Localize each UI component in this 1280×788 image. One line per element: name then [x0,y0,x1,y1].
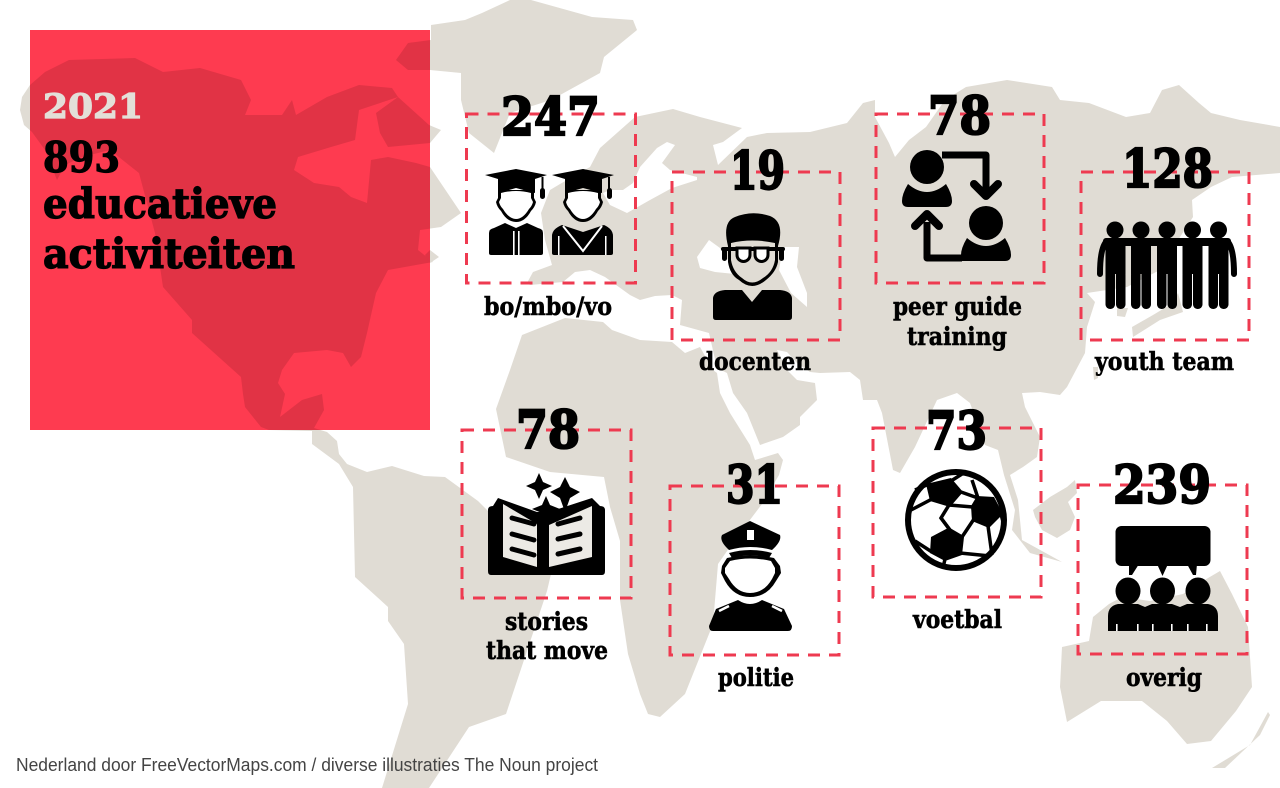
count 128: 128 [1122,139,1213,200]
item: overig [1078,455,1247,692]
count 19: 19 [730,141,785,202]
label stories that move: that move [486,636,608,665]
label peer guide training: peer guide [893,292,1022,321]
count 73: 73 [926,401,987,462]
title text: 893 [43,133,120,182]
label politie: politie [718,663,794,692]
count 247: 247 [501,87,600,148]
label bo/mbo/vo: bo/mbo/vo [484,292,612,321]
label overig: overig [1126,663,1202,692]
label peer guide training: training [907,322,1007,351]
item: voetbal [873,401,1041,634]
count 78: 78 [516,400,580,461]
label youth team: youth team [1094,347,1234,376]
label voetbal: voetbal [912,605,1002,634]
item: docenten [672,141,840,376]
item: youth team [1081,139,1249,376]
icon: two graduates [485,169,614,255]
label peer guide training [893,292,1022,351]
icon: police officer [709,521,792,631]
item: stories that move [462,400,631,665]
label stories that move: stories [505,607,588,636]
label stories that move [486,607,608,665]
title text: 2021 [43,87,143,127]
credits footer: Nederland door FreeVectorMaps.com / diverse illustraties The Noun project [16,755,598,775]
icon: group with speech bubble [1108,526,1218,631]
item: peer guide training [876,86,1044,351]
count 78: 78 [928,86,991,147]
title text: educatieve [43,180,277,228]
item: bo/mbo/vo [466,87,636,321]
icon: soccer ball [908,472,1004,568]
icon: open book with stars [488,473,605,575]
item: politie [670,455,839,692]
icon: teacher with glasses [713,213,792,320]
red title panel [30,30,430,430]
title text: activiteiten [43,230,295,278]
icon: five people [1100,222,1234,309]
icon: peer exchange [902,150,1011,261]
title text [43,87,295,278]
count 239: 239 [1113,455,1211,516]
count 31: 31 [726,455,783,516]
label docenten: docenten [699,347,811,376]
